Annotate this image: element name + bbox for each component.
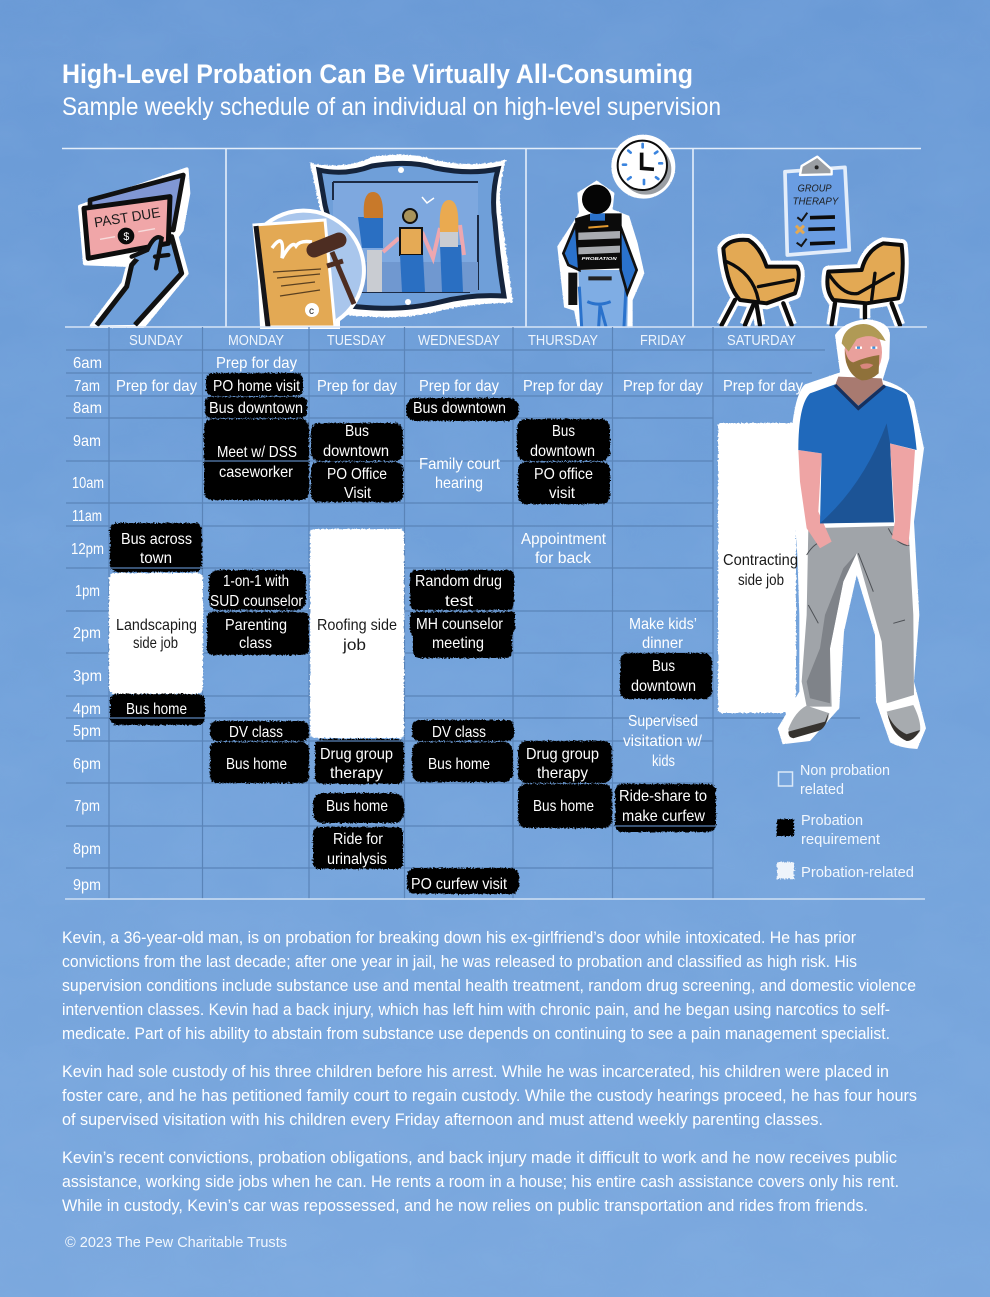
legend: non probation related <box>778 762 890 798</box>
requirement: ride for urinalysis: Ride for <box>333 831 384 848</box>
requirement: Tuesday bus downtown: downtown <box>323 443 389 460</box>
requirement: Monday bus home <box>210 742 309 783</box>
requirement: Tuesday bus downtown: Bus <box>345 423 369 440</box>
requirement: Thursday bus home: Bus home <box>533 798 594 815</box>
time labels: 7am <box>74 378 100 395</box>
requirement: random drug test <box>410 570 514 610</box>
illustration: probation officer and clock <box>558 135 675 327</box>
requirement: parenting class <box>207 612 309 655</box>
requirement: Monday DV class <box>210 721 309 741</box>
probation-related: roofing side job: job <box>342 637 366 654</box>
requirement: parenting class: Parenting <box>225 617 287 634</box>
requirement: Thursday drug group therapy: Drug group <box>526 746 599 763</box>
illustration: group therapy clipboard and chairs: THERAPY <box>793 197 840 208</box>
non-probation: family court hearing: Family court <box>419 456 501 473</box>
non-probation: supervised visitation <box>623 713 703 770</box>
probation-related: landscaping side job <box>109 573 203 694</box>
requirement: Monday bus home: Bus home <box>226 756 287 773</box>
non-probation: appointment for back: for back <box>535 550 592 567</box>
requirement: meet with DSS caseworker <box>204 419 309 500</box>
requirement: ride-share to make curfew: make curfew <box>622 808 705 825</box>
schedule grid <box>65 327 927 899</box>
requirement: bus across town: town <box>140 550 172 567</box>
time labels: 11am <box>72 508 102 525</box>
time labels: 7pm <box>74 798 100 815</box>
body paragraph 2: foster care, and he has petitioned family court to regain custody. While the custody hearings proceed, he has four hours <box>62 1087 917 1105</box>
requirement: Monday DV class: DV class <box>229 724 283 741</box>
probation-related: contracting side job <box>718 423 798 713</box>
day headers: MONDAY <box>228 332 284 349</box>
non-probation: family court hearing: hearing <box>435 475 483 492</box>
illustration: probation officer and clock: PROBATION <box>582 256 617 262</box>
requirement: Tuesday PO office visit: Visit <box>344 485 372 502</box>
requirement: Tuesday bus home: Bus home <box>326 798 388 815</box>
requirement: PO curfew visit: PO curfew visit <box>411 876 507 893</box>
requirement: 1-on-1 with SUD counselor: SUD counselor <box>210 593 304 610</box>
copyright: © 2023 The Pew Charitable Trusts <box>65 1234 287 1251</box>
requirement: Friday bus downtown: Bus <box>652 658 675 675</box>
day headers: FRIDAY <box>640 332 686 349</box>
requirement: Friday bus downtown: downtown <box>631 678 696 695</box>
non-probation: supervised visitation: visitation w/ <box>623 733 703 750</box>
requirement: ride-share to make curfew <box>615 784 716 832</box>
time labels: 4pm <box>73 701 101 718</box>
time labels <box>71 355 104 894</box>
body paragraph 1: convictions from the last decade; after one year in jail, he was released to probation and classified as high risk. His <box>62 953 857 971</box>
requirement: Tuesday PO office visit: PO Office <box>327 466 387 483</box>
body paragraph 3: While in custody, Kevin’s car was repossessed, and he now relies on public transportation and rides from friends. <box>62 1197 868 1215</box>
body paragraph 1: intervention classes. Kevin had a back injury, which has left him with chronic pain, and he began using narcotics to self- <box>62 1001 890 1019</box>
body paragraph 2: Kevin had sole custody of his three children before his arrest. While he was incarcerated, his children were placed in <box>62 1063 889 1081</box>
non-probation activities: prep for day: Prep for day <box>116 378 197 395</box>
requirement: Thursday bus downtown: downtown <box>530 443 595 460</box>
day headers <box>129 332 796 349</box>
time labels: 10am <box>72 475 104 492</box>
requirement: Friday bus downtown <box>620 653 712 699</box>
time labels: 6am <box>73 355 102 372</box>
title: High-Level Probation Can Be Virtually All-Consuming <box>62 59 693 89</box>
legend: probation requirement: requirement <box>801 831 881 848</box>
non-probation activities: prep for day: Prep for day <box>419 378 499 395</box>
requirement: random drug test: test <box>445 593 474 610</box>
requirement: MH counselor meeting: MH counselor <box>416 616 504 633</box>
requirement: Thursday bus home <box>518 784 612 828</box>
probation-related: contracting side job: Contracting <box>723 552 798 569</box>
requirement: Wednesday bus downtown: Bus downtown <box>413 400 506 417</box>
requirement: Thursday drug group therapy <box>518 741 612 783</box>
time labels: 8pm <box>73 841 101 858</box>
requirement: Thursday drug group therapy: therapy <box>537 765 588 782</box>
time labels: 3pm <box>73 668 102 685</box>
probation-related: landscaping side job: side job <box>133 635 178 652</box>
requirement: Sunday bus home: Bus home <box>126 701 187 718</box>
body paragraph 2 <box>62 1063 917 1129</box>
illustration: group therapy clipboard and chairs: GROUP <box>798 183 832 194</box>
non-probation: appointment for back: Appointment <box>521 531 607 548</box>
body paragraph 1: Kevin, a 36-year-old man, is on probation for breaking down his ex-girlfriend’s door while intoxicated. He has prior <box>62 929 856 947</box>
illustration: group therapy clipboard and chairs <box>722 157 903 325</box>
non-probation: make kids dinner: Make kids’ <box>629 616 697 633</box>
non-probation activities: prep for day: Prep for day <box>317 378 397 395</box>
time labels: 9pm <box>73 877 101 894</box>
requirement: Thursday PO office visit: PO office <box>534 466 593 483</box>
body paragraph 3: assistance, working side jobs when he can. He rents a room in a house; his entire cash assistance covers only his rent. <box>62 1173 899 1191</box>
time labels: 6pm <box>73 756 101 773</box>
requirement: bus across town: Bus across <box>121 531 192 548</box>
legend: probation requirement <box>777 812 881 848</box>
probation-related: contracting side job: side job <box>738 572 784 589</box>
requirement: random drug test: Random drug <box>415 573 502 590</box>
requirement: Thursday bus downtown <box>517 419 610 461</box>
illustration: past due bill in hand: PAST DUE <box>93 204 161 230</box>
requirement: Wednesday bus downtown <box>406 398 519 421</box>
body paragraph 1: supervision conditions include substance use and mental health treatment, random drug screening, and domestic violence <box>62 977 916 995</box>
requirement: Wednesday DV class: DV class <box>432 724 486 741</box>
non-probation activities: prep for day: Prep for day <box>623 378 703 395</box>
body paragraph 3 <box>62 1149 899 1215</box>
illustration: court document and gavel <box>254 211 364 327</box>
body paragraph 1 <box>62 929 916 1043</box>
requirement: ride for urinalysis: urinalysis <box>327 851 387 868</box>
requirement: PO home visit: PO home visit <box>213 378 300 395</box>
requirement: Tuesday drug group therapy: Drug group <box>320 746 393 763</box>
legend: non probation related: related <box>800 781 844 798</box>
time labels: 5pm <box>73 723 101 740</box>
requirement: Thursday bus downtown: Bus <box>552 423 575 440</box>
requirement: MH counselor meeting: meeting <box>432 635 484 652</box>
legend: probation requirement: Probation <box>801 812 863 829</box>
day headers: THURSDAY <box>528 332 598 349</box>
requirement: Wednesday DV class <box>412 720 514 741</box>
requirement: meet with DSS caseworker: Meet w/ DSS <box>217 444 297 461</box>
requirement: meet with DSS caseworker: caseworker <box>219 464 294 481</box>
requirement: Tuesday PO office visit <box>311 462 403 502</box>
requirement: ride for urinalysis <box>313 827 403 869</box>
probation-related: roofing side job <box>310 529 404 738</box>
time labels: 8am <box>73 400 102 417</box>
requirement: Monday bus downtown: Bus downtown <box>209 400 303 417</box>
illustration: family portrait in frame <box>310 155 513 317</box>
time labels: 12pm <box>71 541 104 558</box>
time labels: 1pm <box>75 583 100 600</box>
non-probation activities: prep for day: Prep for day <box>523 378 603 395</box>
requirement: MH counselor meeting <box>410 612 515 658</box>
requirement: Tuesday drug group therapy <box>315 739 404 784</box>
day headers: SATURDAY <box>727 332 796 349</box>
requirement: Wednesday bus home <box>412 742 513 782</box>
non-probation activities: prep for day: Prep for day <box>723 378 803 395</box>
requirement: 1-on-1 with SUD counselor <box>209 570 306 610</box>
requirement: Thursday PO office visit <box>518 462 610 504</box>
non-probation: family court hearing <box>419 456 501 492</box>
body paragraph 2: of supervised visitation with his children every Friday afternoon and must attend weekly parenting classes. <box>62 1111 823 1129</box>
time labels: 2pm <box>73 625 101 642</box>
requirement: PO curfew visit <box>407 868 519 894</box>
probation-related: landscaping side job: Landscaping <box>116 617 197 634</box>
body paragraph 3: Kevin’s recent convictions, probation obligations, and back injury made it difficult to work and he now receives public <box>62 1149 897 1167</box>
non-probation activities: prep for day <box>116 355 803 395</box>
illustration: past due bill in hand <box>80 169 188 326</box>
requirement: 1-on-1 with SUD counselor: 1-on-1 with <box>223 573 289 590</box>
illustration band frame <box>62 148 921 327</box>
probation-related: roofing side job: Roofing side <box>317 617 397 634</box>
illustration: Kevin standing <box>778 319 926 749</box>
requirement: Wednesday bus home: Bus home <box>428 756 490 773</box>
non-probation activities: prep for day: Prep for day <box>216 355 297 372</box>
day headers: TUESDAY <box>327 332 386 349</box>
requirement: Thursday PO office visit: visit <box>549 485 576 502</box>
illustration: past due bill in hand: $ <box>123 231 129 243</box>
body paragraph 1: medicate. Part of his ability to abstain from substance use depends on continuing to see a pain management specialist. <box>62 1025 890 1043</box>
requirement: Tuesday bus home <box>313 793 404 823</box>
non-probation: make kids dinner <box>629 616 697 652</box>
requirement: PO home visit <box>206 373 303 396</box>
requirement: bus across town <box>110 523 202 572</box>
day headers: WEDNESDAY <box>418 332 500 349</box>
non-probation: supervised visitation: kids <box>652 753 675 770</box>
requirement: Sunday bus home <box>110 694 205 725</box>
requirement: parenting class: class <box>239 635 272 652</box>
requirement: Tuesday bus downtown <box>311 423 403 461</box>
illustration: court document and gavel: c <box>309 306 314 317</box>
requirement: ride-share to make curfew: Ride-share to <box>619 788 707 805</box>
non-probation: appointment for back <box>521 531 607 567</box>
requirement: Tuesday drug group therapy: therapy <box>330 765 383 782</box>
day headers: SUNDAY <box>129 332 183 349</box>
non-probation: supervised visitation: Supervised <box>628 713 698 730</box>
legend: probation-related: Probation-related <box>801 864 914 881</box>
non-probation: make kids dinner: dinner <box>642 635 684 652</box>
subtitle: Sample weekly schedule of an individual on high-level supervision <box>62 93 721 121</box>
time labels: 9am <box>73 433 101 450</box>
legend: non probation related: Non probation <box>800 762 890 779</box>
